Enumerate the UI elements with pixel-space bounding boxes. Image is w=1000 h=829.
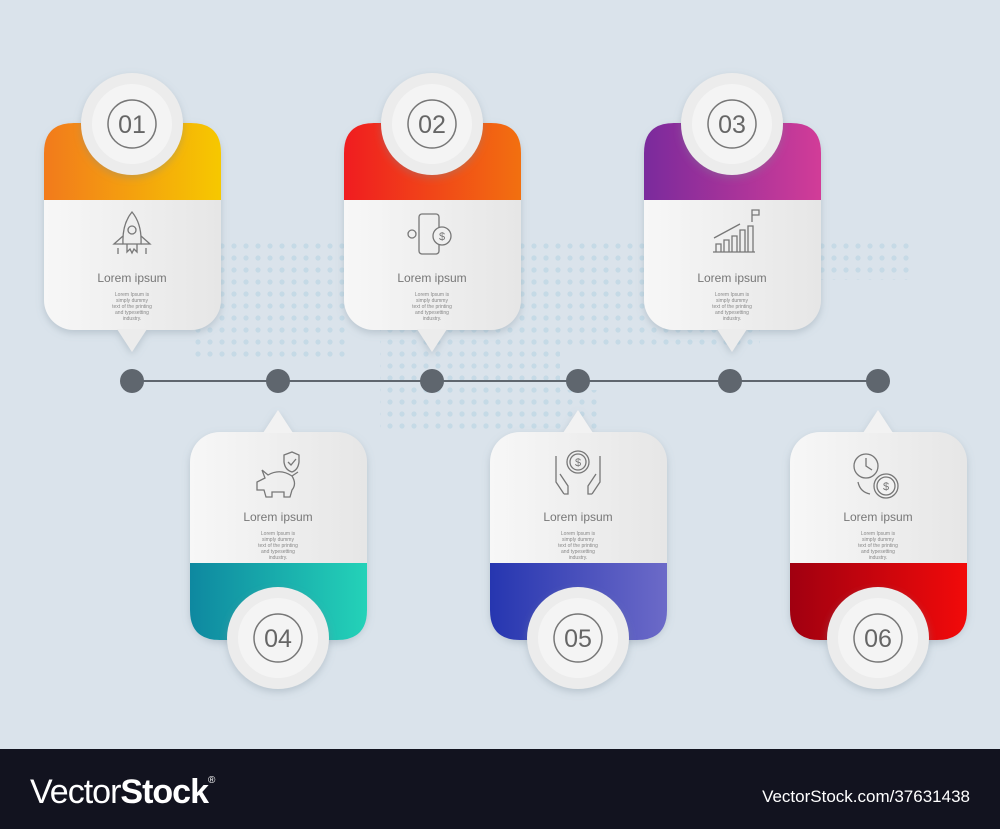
icon: clock and coin: $	[883, 481, 889, 493]
card 03: simply dummy	[716, 298, 748, 304]
number 02	[408, 100, 456, 148]
footer logo: VectorStock	[30, 773, 208, 811]
card 04: Lorem Ipsum is	[261, 531, 296, 537]
number 05	[554, 614, 602, 662]
card 02: industry.	[423, 316, 441, 322]
icon: phone with dollar: $	[439, 231, 445, 243]
card 06: simply dummy	[862, 537, 894, 543]
card 01: industry.	[123, 316, 141, 322]
card 05: Lorem ipsum	[543, 510, 613, 524]
card 05: text of the printing	[558, 543, 598, 549]
number 02: 02	[418, 111, 446, 139]
card 06	[790, 410, 967, 689]
number 03: 03	[718, 111, 746, 139]
icon: hands holding coin	[556, 451, 600, 494]
card 03: Lorem Ipsum is	[715, 292, 750, 298]
icon: piggy bank with shield	[257, 452, 299, 497]
card 01: text of the printing	[112, 304, 152, 310]
card 04: and typesetting	[261, 549, 295, 555]
card 02: Lorem ipsum	[397, 271, 467, 285]
icon: hands holding coin: $	[575, 457, 581, 469]
card 01: and typesetting	[115, 310, 149, 316]
card 03: industry.	[723, 316, 741, 322]
icon: rocket	[114, 212, 150, 254]
icon: phone with dollar	[408, 214, 451, 254]
timeline	[120, 369, 890, 393]
card 03: and typesetting	[715, 310, 749, 316]
background world map dots	[195, 240, 910, 430]
card 05: and typesetting	[561, 549, 595, 555]
card 04	[190, 410, 367, 689]
card 06: Lorem ipsum	[843, 510, 913, 524]
footer bar	[0, 749, 1000, 829]
card 05	[490, 410, 667, 689]
icon: clock and coin	[854, 454, 898, 498]
number 04	[254, 614, 302, 662]
number 01	[108, 100, 156, 148]
card 01: Lorem ipsum	[97, 271, 167, 285]
card 05: Lorem Ipsum is	[561, 531, 596, 537]
card 06: industry.	[869, 555, 887, 561]
number 05: 05	[564, 625, 592, 653]
number 03	[708, 100, 756, 148]
card 02: and typesetting	[415, 310, 449, 316]
card 01: Lorem Ipsum is	[115, 292, 150, 298]
icon: bar chart growth	[713, 210, 759, 252]
card 05: simply dummy	[562, 537, 594, 543]
card 06: and typesetting	[861, 549, 895, 555]
card 04: text of the printing	[258, 543, 298, 549]
card 03	[644, 73, 821, 352]
card 06: Lorem Ipsum is	[861, 531, 896, 537]
card 03: Lorem ipsum	[697, 271, 767, 285]
card 02: text of the printing	[412, 304, 452, 310]
card 02: Lorem Ipsum is	[415, 292, 450, 298]
footer logo: ®	[208, 775, 216, 786]
card 02: simply dummy	[416, 298, 448, 304]
number 06: 06	[864, 625, 892, 653]
number 01: 01	[118, 111, 146, 139]
card 04: simply dummy	[262, 537, 294, 543]
card 05: industry.	[569, 555, 587, 561]
card 04: Lorem ipsum	[243, 510, 313, 524]
number 06	[854, 614, 902, 662]
number 04: 04	[264, 625, 292, 653]
card 01	[44, 73, 221, 352]
card 01: simply dummy	[116, 298, 148, 304]
card 04: industry.	[269, 555, 287, 561]
card 06: text of the printing	[858, 543, 898, 549]
card 02	[344, 73, 521, 352]
card 03: text of the printing	[712, 304, 752, 310]
footer url: VectorStock.com/37631438	[762, 787, 970, 806]
